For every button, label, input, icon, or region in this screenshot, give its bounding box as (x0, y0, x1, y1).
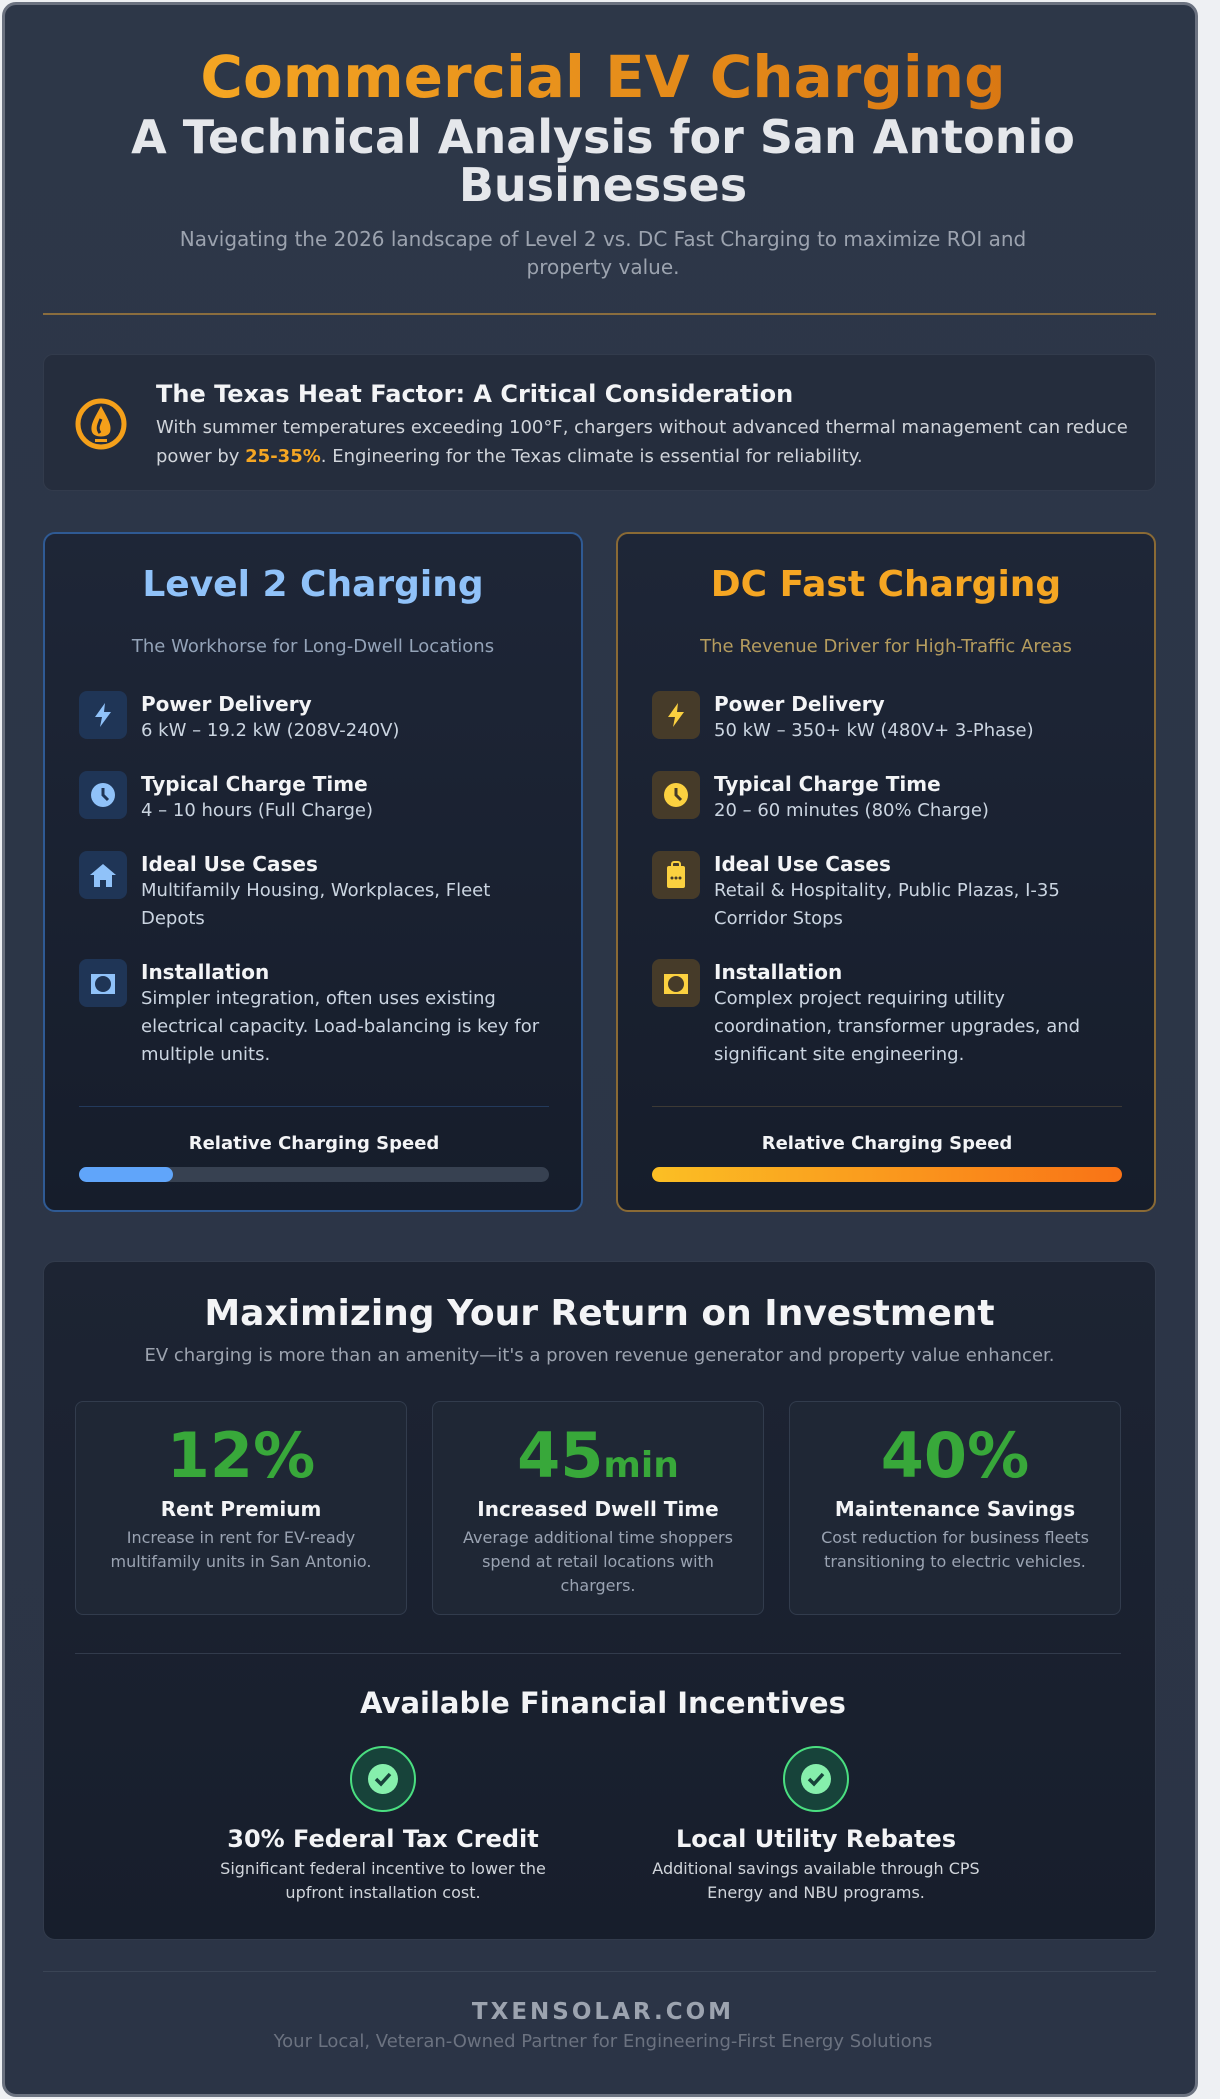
stat: dwell: Average additional time shoppers spend at retail locations with chargers. (463, 1528, 733, 1595)
panel: ROI (43, 1261, 1156, 1940)
icon: heat (76, 398, 126, 450)
stat: rent: Increase in rent for EV-ready multifamily units in San Antonio. (111, 1528, 371, 1571)
item: power: Power Delivery (714, 692, 885, 716)
item: use cases: Multifamily Housing, Workplaces, Fleet Depots (141, 880, 490, 929)
footer: Your Local, Veteran-Owned Partner for Engineering-First Energy Solutions (274, 2031, 932, 2052)
item: time (79, 771, 373, 821)
stat: maintenance (789, 1401, 1121, 1615)
item: power: 50 kW – 350+ kW (480V+ 3-Phase) (714, 720, 1034, 741)
item: installation: Installation (141, 960, 269, 984)
item: installation: Installation (714, 960, 842, 984)
stat: dwell: 45min (517, 1419, 679, 1492)
item: power (79, 691, 399, 741)
item: power (652, 691, 1034, 741)
footer (274, 1999, 932, 2052)
icon: clipboard (652, 851, 700, 899)
item: installation: Simpler integration, often uses existing electrical capacity. Load-balancing is key for multiple units. (141, 988, 539, 1065)
item: use cases (652, 851, 1060, 929)
item: power: Power Delivery (141, 692, 312, 716)
item: time: Typical Charge Time (141, 772, 368, 796)
panel: level 2 (43, 532, 583, 1212)
bar chart: level 2 speed: Relative Charging Speed (189, 1133, 439, 1154)
footer: TXENSOLAR.COM (472, 1999, 734, 2025)
bar chart: level 2 speed (79, 1133, 549, 1182)
tagline: Navigating the 2026 landscape of Level 2 vs. DC Fast Charging to maximize ROI and property value. (180, 227, 1026, 279)
item: time: Typical Charge Time (714, 772, 941, 796)
item: installation (79, 959, 540, 1065)
stat: dwell: Increased Dwell Time (477, 1497, 719, 1521)
panel: texas heat factor (43, 354, 1156, 491)
incentive: rebates: Additional savings available through CPS Energy and NBU programs. (652, 1859, 980, 1902)
icon: clock (79, 771, 127, 819)
heading: incentives: Available Financial Incentives (360, 1686, 846, 1720)
heading: The Texas Heat Factor: A Critical Consideration (156, 380, 793, 408)
incentive: tax credit: Significant federal incentive to lower the upfront installation cost. (220, 1859, 546, 1902)
item: installation: Complex project requiring utility coordination, transformer upgrades, and significant site engineering. (714, 988, 1080, 1065)
item: time: 20 – 60 minutes (80% Charge) (714, 800, 989, 821)
icon: check (350, 1746, 416, 1812)
stat: rent: 12% (167, 1419, 315, 1492)
incentive: tax credit (220, 1746, 546, 1902)
item: installation (652, 959, 1080, 1065)
bar chart: dc speed (652, 1133, 1122, 1182)
item: time (652, 771, 989, 821)
title: Commercial EV Charging (200, 43, 1006, 111)
icon: check (783, 1746, 849, 1812)
icon: home (79, 851, 127, 899)
bar chart: dc speed: Relative Charging Speed (762, 1133, 1012, 1154)
stat: maintenance: 40% (881, 1419, 1029, 1492)
heading: DC Fast Charging (711, 564, 1061, 605)
item: time: 4 – 10 hours (Full Charge) (141, 800, 373, 821)
incentive: rebates: Local Utility Rebates (676, 1825, 956, 1853)
subheading: EV charging is more than an amenity—it's a proven revenue generator and property value enhancer. (144, 1345, 1054, 1366)
icon: bolt (652, 691, 700, 739)
heading: Level 2 Charging (142, 564, 484, 605)
panel: dc fast (616, 532, 1156, 1212)
icon: install (79, 959, 127, 1007)
subheading: The Workhorse for Long-Dwell Locations (132, 636, 494, 657)
heading: Maximizing Your Return on Investment (204, 1293, 995, 1334)
stat: maintenance: Maintenance Savings (835, 1497, 1075, 1521)
item: use cases: Ideal Use Cases (714, 852, 891, 876)
icon: clock (652, 771, 700, 819)
stat: dwell (432, 1401, 764, 1615)
text: With summer temperatures exceeding 100°F, chargers without advanced thermal management can reduce power by 25-35%. Engineering for the Texas climate is essential for reliability. (156, 417, 1128, 467)
subheading: The Revenue Driver for High-Traffic Areas (700, 636, 1072, 657)
stat: rent: Rent Premium (161, 1497, 321, 1521)
stat: rent (75, 1401, 407, 1615)
incentive: tax credit: 30% Federal Tax Credit (227, 1825, 539, 1853)
stat: maintenance: Cost reduction for business fleets transitioning to electric vehicles. (821, 1528, 1089, 1571)
item: power: 6 kW – 19.2 kW (208V-240V) (141, 720, 399, 741)
incentive: rebates (652, 1746, 980, 1902)
item: use cases: Ideal Use Cases (141, 852, 318, 876)
item: use cases (79, 851, 490, 929)
item: use cases: Retail & Hospitality, Public Plazas, I-35 Corridor Stops (714, 880, 1060, 929)
subtitle: A Technical Analysis for San Antonio Businesses (131, 110, 1075, 212)
icon: install (652, 959, 700, 1007)
icon: bolt (79, 691, 127, 739)
